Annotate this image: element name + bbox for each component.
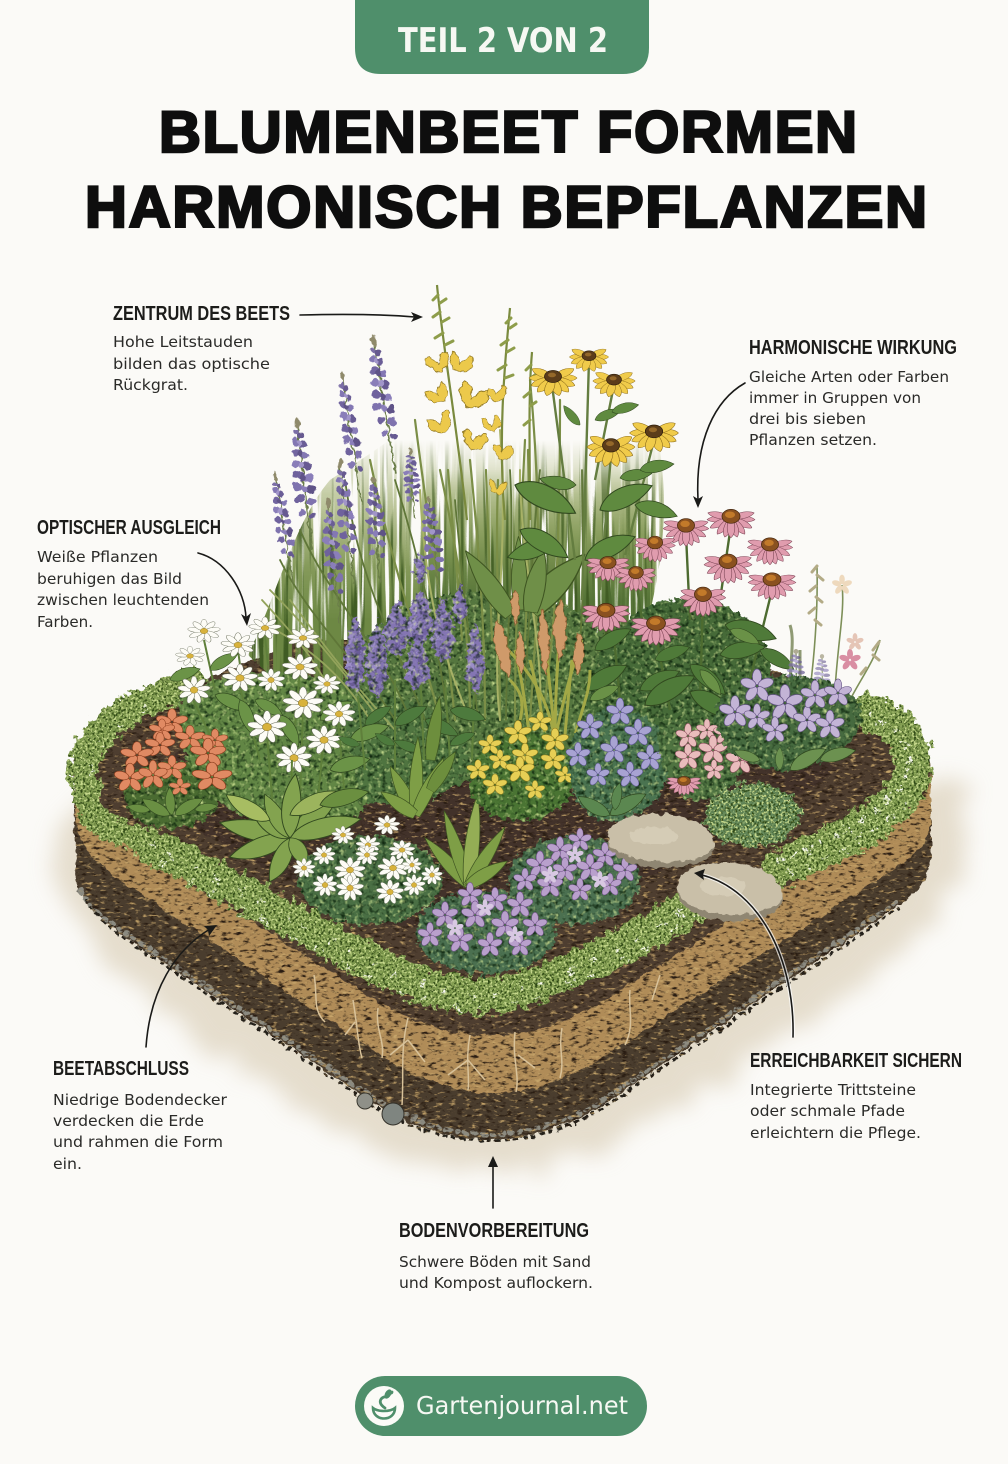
echinacea group [580, 509, 798, 725]
callout: Optischer Ausgleich: beruhigen das Bild [37, 570, 182, 588]
callout: Beetabschluss: und rahmen die Form [53, 1133, 223, 1151]
pink low flowers [659, 719, 755, 801]
arrow: Bodenvorbereitung [488, 1156, 498, 1208]
callout: Beetabschluss: Niedrige Bodendecker [53, 1091, 228, 1109]
arrow: Optischer Ausgleich [198, 553, 251, 626]
stones and roots [314, 975, 660, 1125]
ground wash shadow [50, 776, 968, 1170]
yellow coreopsis clump [466, 712, 576, 821]
feather grass [495, 590, 590, 740]
top soil surface [73, 640, 931, 1036]
callout: Harmonische Wirkung: drei bis sieben [749, 410, 866, 428]
hosta-like foliage [218, 760, 371, 886]
central lance leaves [455, 536, 592, 620]
callout: Optischer Ausgleich: zwischen leuchtenden [37, 591, 209, 609]
callout: Optischer Ausgleich [37, 517, 221, 631]
groundcover border [83, 682, 914, 1009]
arrow: Zentrum [300, 312, 423, 322]
light lilac spires on right [786, 566, 880, 712]
illustration: raised flower bed [50, 285, 968, 1170]
callout: Erreichbarkeit sichern [750, 1050, 962, 1142]
white starflower clump [292, 815, 443, 924]
callout: Beetabschluss: BEETABSCHLUSS [53, 1058, 189, 1080]
title [85, 100, 927, 240]
badge: part indicator [355, 0, 649, 74]
stepping stones [608, 814, 782, 921]
footer brand pill: Gartenjournal.net [416, 1391, 628, 1420]
foliage mass [178, 592, 771, 830]
callout: Zentrum des Beets: bilden das optische [113, 355, 270, 373]
callout: Erreichbarkeit sichern: Integrierte Trittsteine [750, 1081, 916, 1099]
callout: Erreichbarkeit sichern: erleichtern die Pflege. [750, 1124, 921, 1142]
callout: Optischer Ausgleich: Weiße Pflanzen [37, 548, 158, 566]
callout: Bodenvorbereitung: und Kompost auflockern. [399, 1274, 593, 1292]
tall grasses and stems [255, 380, 583, 730]
arrow: Beetabschluss [146, 925, 217, 1047]
gravel edge [80, 890, 900, 1134]
callout: Harmonische Wirkung [749, 337, 957, 449]
callout: Optischer Ausgleich: OPTISCHER AUSGLEICH [37, 517, 221, 539]
badge: part indicator: TEIL 2 VON 2 [398, 21, 608, 61]
title: BLUMENBEET FORMEN [159, 100, 857, 165]
callout: Beetabschluss: verdecken die Erde [53, 1112, 204, 1130]
title: HARMONISCH BEPFLANZEN [85, 175, 927, 240]
blue-purple clump [565, 698, 672, 821]
callout: Bodenvorbereitung: Schwere Böden mit Sand [399, 1253, 591, 1271]
black-eyed susans [505, 347, 679, 600]
arrow: Harmonische [693, 383, 745, 508]
lush lavender in front [337, 553, 487, 770]
callout: Optischer Ausgleich: Farben. [37, 613, 93, 631]
callout: Zentrum des Beets: Rückgrat. [113, 376, 188, 394]
sandy middle layer [75, 770, 931, 1093]
callout: Harmonische Wirkung: HARMONISCHE WIRKUNG [749, 337, 957, 359]
arrow: Erreichbarkeit [694, 869, 793, 1037]
footer brand pill [355, 1376, 647, 1436]
purple phlox clumps [416, 828, 640, 974]
tall purple spikes [266, 333, 449, 625]
orange flowers [113, 709, 233, 829]
callout: Harmonische Wirkung: immer in Gruppen von [749, 389, 921, 407]
green shrub [704, 783, 800, 847]
icon: seedling logo [364, 1386, 404, 1426]
callout: Harmonische Wirkung: Pflanzen setzen. [749, 431, 877, 449]
callout: Beetabschluss [53, 1058, 228, 1173]
white daisies [168, 617, 391, 810]
callout: Bodenvorbereitung [399, 1220, 593, 1292]
callout: Zentrum des Beets: Hohe Leitstauden [113, 333, 253, 351]
soil cross-section [73, 640, 931, 1141]
tall yellow spires [423, 285, 536, 520]
callout: Erreichbarkeit sichern: oder schmale Pfade [750, 1102, 905, 1120]
background grass mass [248, 385, 664, 740]
callout: Beetabschluss: ein. [53, 1155, 82, 1173]
callout: Zentrum des Beets: ZENTRUM DES BEETS [113, 303, 290, 325]
callout: Harmonische Wirkung: Gleiche Arten oder Farben [749, 368, 949, 386]
callout: Zentrum des Beets [113, 303, 290, 394]
callout: Bodenvorbereitung: BODENVORBEREITUNG [399, 1220, 589, 1242]
grass blade clumps [376, 695, 510, 891]
right lilac clump [715, 669, 862, 775]
lower dark soil and gravel [73, 780, 931, 1140]
